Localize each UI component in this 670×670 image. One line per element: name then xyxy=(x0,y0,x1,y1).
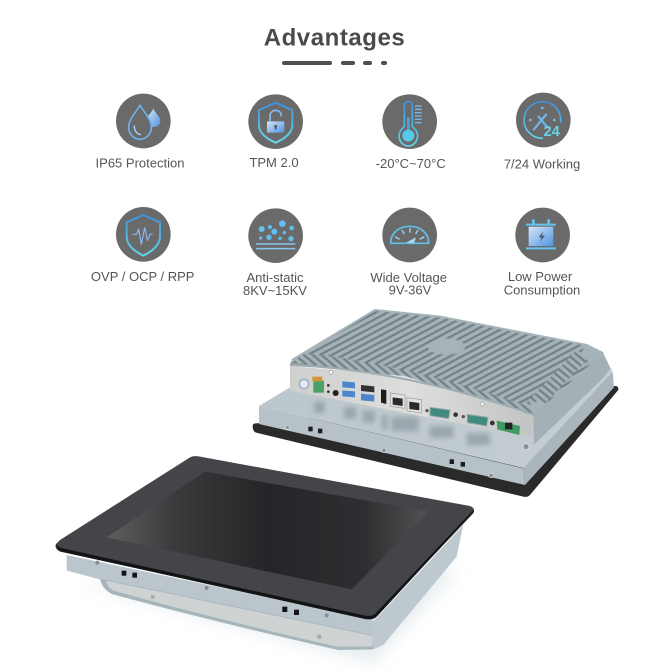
screen xyxy=(107,472,428,589)
label: Wide Voltage 9V-36V xyxy=(370,270,447,298)
silver back plate xyxy=(259,368,614,485)
icon: anti-static particles xyxy=(248,208,303,263)
soft shadow xyxy=(80,567,460,663)
plate reflections xyxy=(314,402,490,445)
label: Wide Voltage 9V-36V: 9V-36V xyxy=(389,282,432,298)
icon: thermometer xyxy=(382,94,437,149)
heatsink side wall xyxy=(533,353,611,445)
icon: shield with waveform xyxy=(116,207,171,262)
heatsink top with fins xyxy=(290,310,603,415)
I/O ports xyxy=(299,370,520,435)
lower stainless plate and body xyxy=(67,525,463,650)
icon: clock 24: 24 xyxy=(543,124,561,140)
heatsink rim xyxy=(292,310,603,360)
label: TPM 2.0: TPM 2.0 xyxy=(249,155,299,170)
label: Anti-static 8KV~15KV xyxy=(243,270,307,298)
bezel xyxy=(55,456,474,619)
brushed I/O face xyxy=(290,366,533,437)
icon: battery xyxy=(515,208,570,262)
icon: voltage gauge xyxy=(382,208,437,262)
label: Low Power Consumption: Consumption xyxy=(504,282,580,298)
rubber bezel frame xyxy=(253,386,618,497)
label: temperature range: -20°C~70°C xyxy=(376,156,446,171)
slots and screws xyxy=(95,561,329,639)
title: Advantages xyxy=(264,25,405,52)
icon: shield with lock xyxy=(248,94,303,149)
label: Anti-static 8KV~15KV: Anti-static xyxy=(246,270,304,285)
label: IP65 Protection: IP65 Protection xyxy=(96,156,184,170)
icon: water drops xyxy=(116,94,171,148)
icon: clock 24 xyxy=(516,93,571,147)
label: Wide Voltage 9V-36V: Wide Voltage xyxy=(370,270,447,285)
label: Low Power Consumption: Low Power xyxy=(508,269,573,284)
device: front view panel PC xyxy=(55,456,474,663)
label: 7/24 Working: 7/24 Working xyxy=(504,156,580,172)
device: rear view panel PC xyxy=(253,310,618,497)
label: Low Power Consumption xyxy=(504,269,580,298)
title underline xyxy=(282,61,387,65)
label: Anti-static 8KV~15KV: 8KV~15KV xyxy=(243,283,307,298)
label: OVP / OCP / RPP: OVP / OCP / RPP xyxy=(91,269,194,284)
plate slots and screws xyxy=(285,425,529,478)
bezel edge xyxy=(56,510,474,619)
